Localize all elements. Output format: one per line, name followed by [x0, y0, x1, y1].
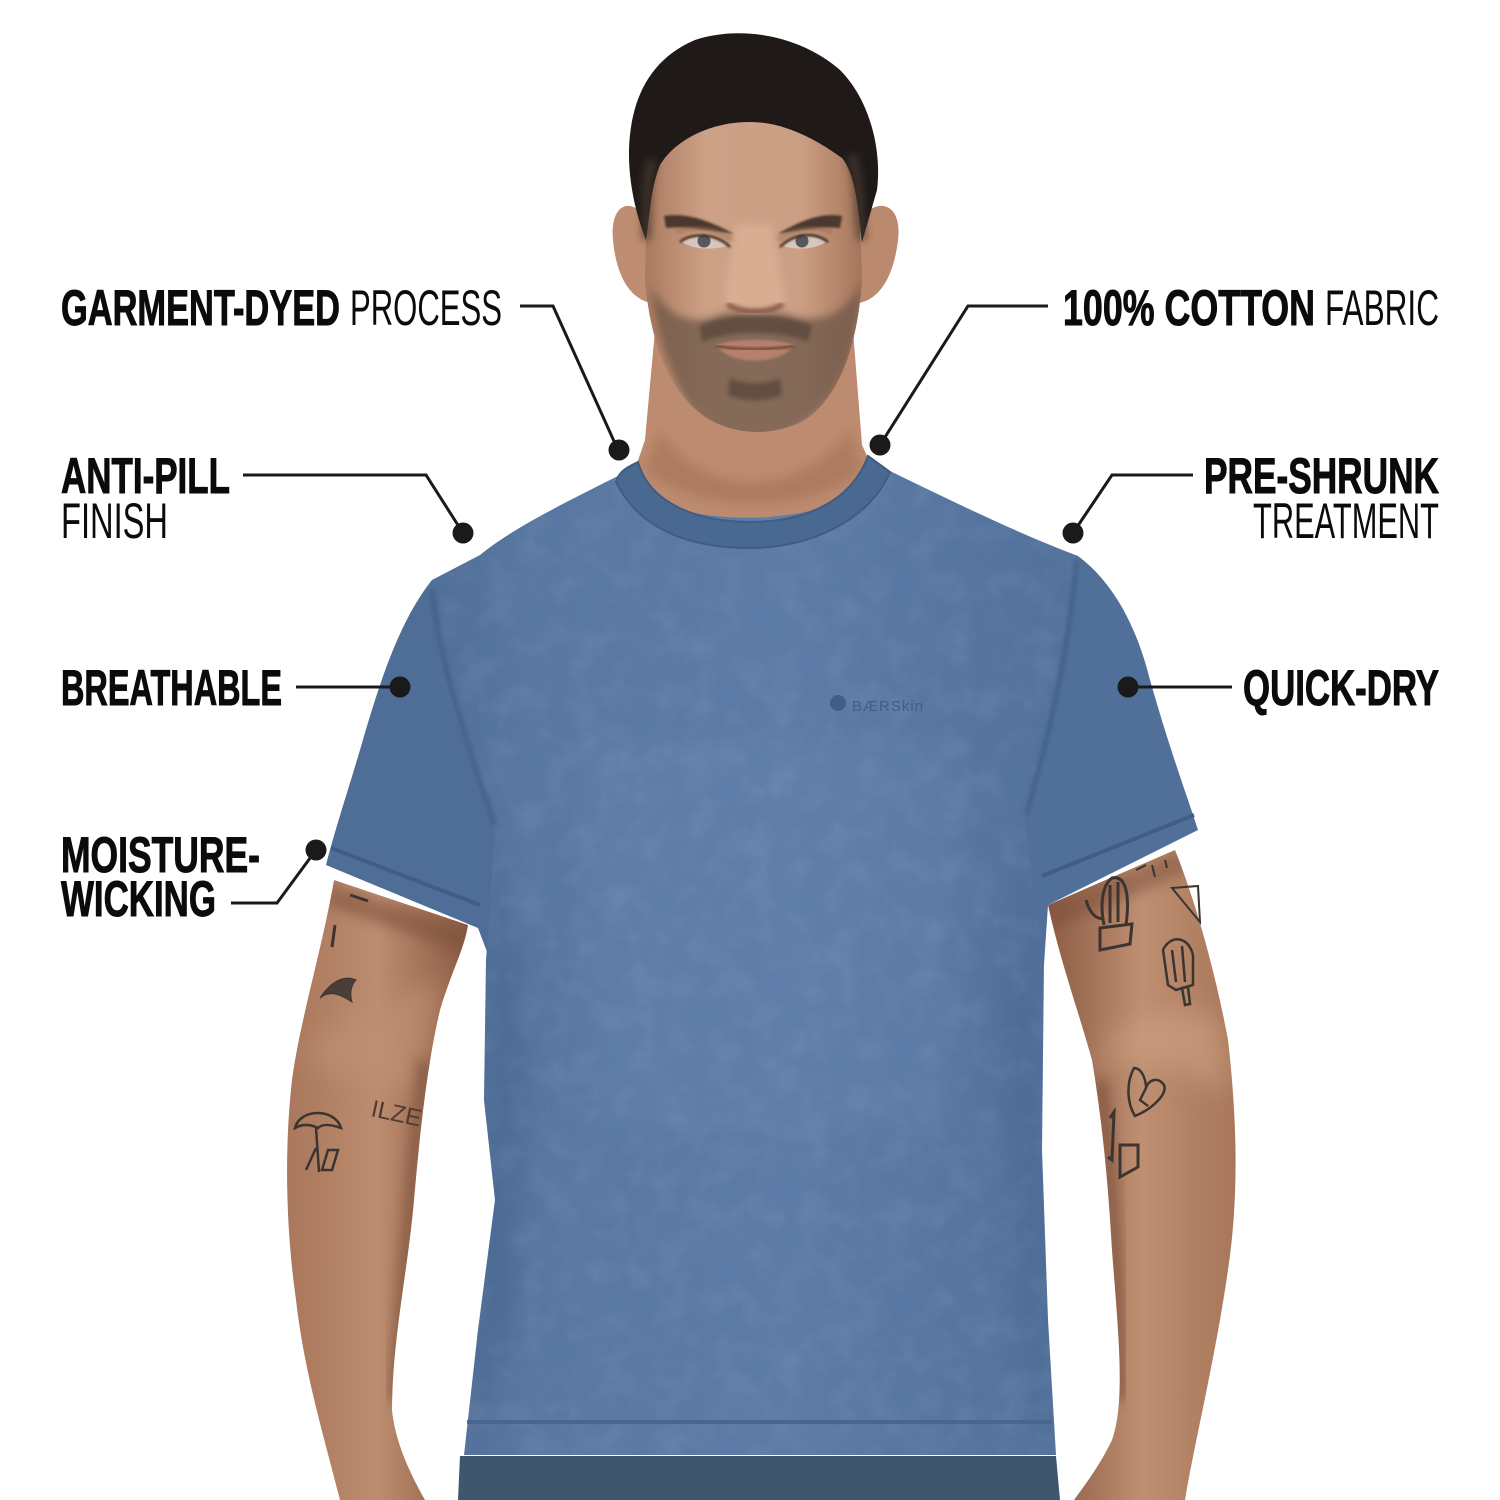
sleeve hems [331, 815, 1194, 905]
eyes and eyebrows [664, 215, 842, 249]
tattoo: umbrella and chair [295, 1113, 341, 1172]
sleeve right [1015, 556, 1198, 965]
right arm [1045, 850, 1236, 1500]
sleeve left [326, 580, 520, 965]
tattoo: fish [320, 978, 356, 1002]
callout: breathable: BREATHABLE [61, 660, 282, 716]
tattoos [295, 860, 1200, 1177]
nose [726, 225, 784, 311]
callout: moisture-wicking: MOISTURE- [61, 827, 260, 883]
mouth [716, 340, 794, 361]
callout: pre-shrunk treatment [1062, 448, 1439, 549]
callout: garment-dyed process: GARMENT-DYED [61, 280, 340, 336]
callout: garment-dyed process [61, 280, 630, 460]
callout: quick-dry [1118, 660, 1439, 716]
bottom hem [467, 1420, 1052, 1424]
collar [616, 456, 890, 548]
shoulder seams [432, 560, 1076, 825]
callout: garment-dyed process: PROCESS [350, 280, 502, 336]
callout: moisture-wicking [61, 827, 326, 927]
shirt shading [430, 470, 1080, 1460]
callout: 100% cotton fabric: 100% COTTON [1063, 280, 1315, 336]
callout: 100% cotton fabric [870, 280, 1439, 456]
tattoo: skull and small marks [1108, 1112, 1138, 1177]
face [645, 112, 862, 432]
callout: moisture-wicking: WICKING [61, 871, 216, 927]
photo: man wearing blue t-shirt [287, 33, 1236, 1500]
tattoo: popsicle [1163, 939, 1193, 1005]
left arm [287, 880, 470, 1500]
embroidered logo: BÆRSkin [852, 698, 924, 715]
tattoo: cactus [1086, 878, 1132, 950]
tattoo: heart [1128, 1068, 1165, 1116]
callout: anti-pill finish [61, 448, 474, 549]
t-shirt [326, 456, 1198, 1460]
body [432, 470, 1078, 1455]
tattoo: letters: ILZE [369, 1095, 424, 1132]
hair [629, 33, 878, 242]
beard [650, 280, 862, 441]
callout: anti-pill finish: ANTI-PILL [61, 448, 230, 504]
neck [628, 330, 878, 530]
ears [613, 206, 652, 303]
jeans [458, 1456, 1060, 1500]
callout: anti-pill finish: FINISH [61, 493, 168, 549]
